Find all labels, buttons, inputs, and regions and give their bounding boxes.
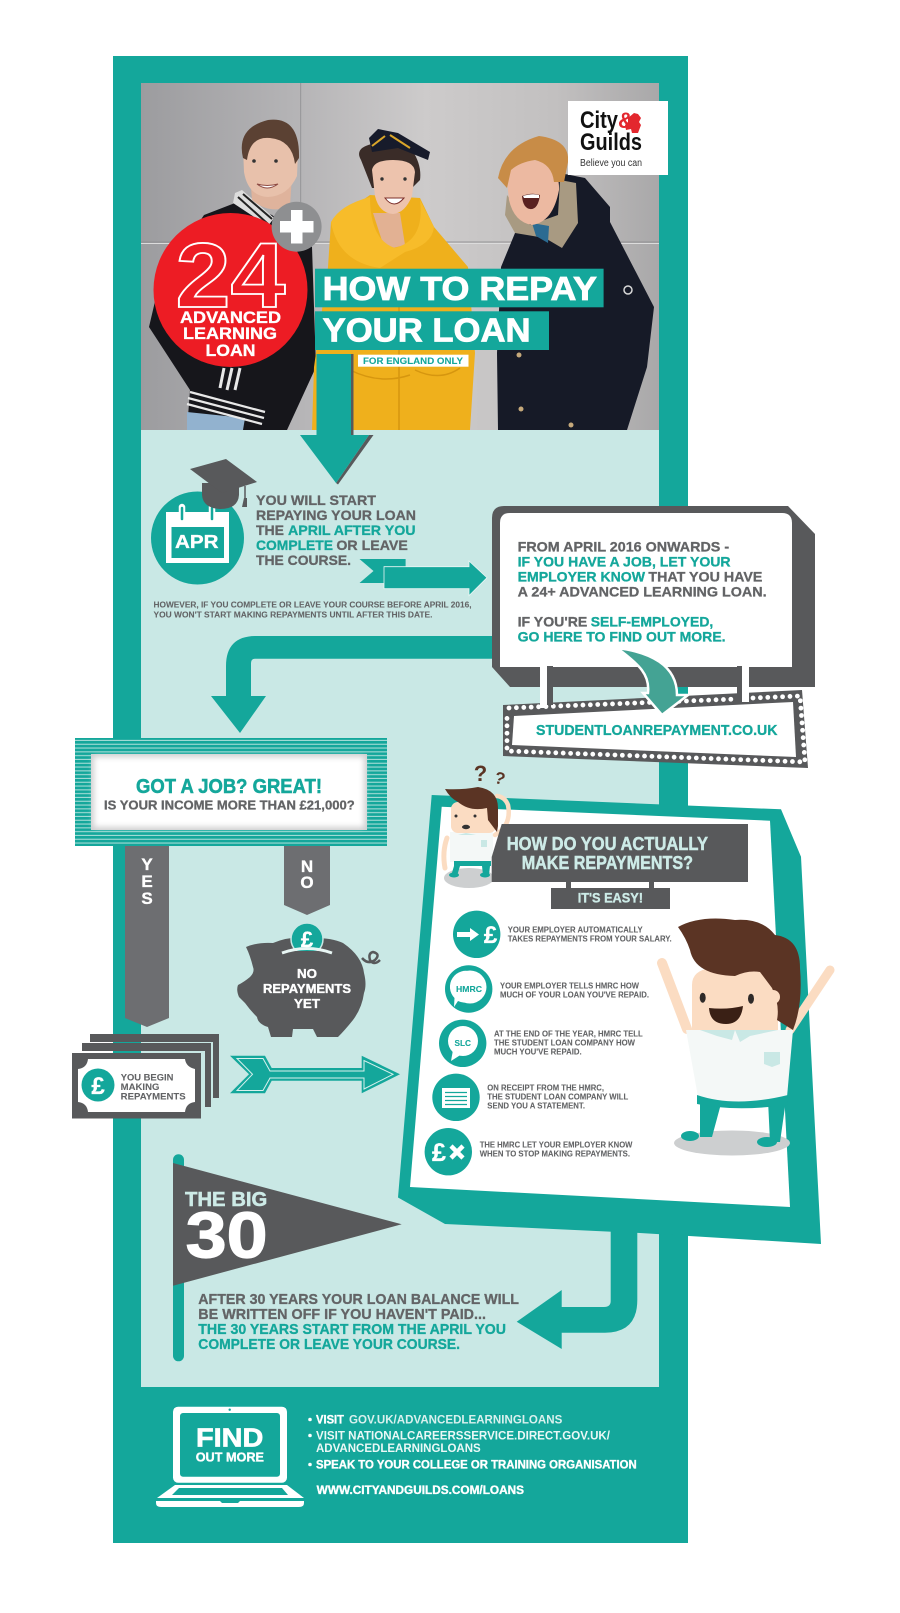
ribbon: yes [125,846,169,1027]
flag: the big 30 [173,1154,402,1361]
title: YOUR LOAN [323,312,531,349]
outer teal frame [113,56,688,1543]
arrow: ribbon arrow to billboard [360,559,487,596]
step 2: employer tells HMRC [445,965,649,1013]
step 1: employer takes repayments: YOUR EMPLOYER AUTOMATICALLY [508,925,643,935]
text: you will start repaying: THE [256,522,284,538]
list: find out more links: VISIT [316,1414,344,1426]
character: confused man [444,761,509,888]
list: find out more links: GOV.UK/ADVANCEDLEARNINGLOANS [349,1414,563,1426]
step 2: employer tells HMRC: MUCH OF YOUR LOAN YOU'VE REPAID. [500,989,649,999]
icon: banknotes you begin making repayments: YOU BEGIN [121,1073,174,1084]
panel: got a job question [75,738,387,846]
logo: City and Guilds: City [580,107,619,134]
text: you will start repaying: THE COURSE. [256,552,351,568]
text: you will start repaying: YOU WILL START [256,492,376,508]
text: note on April 2016: YOU WON'T START MAKING REPAYMENTS UNTIL AFTER THIS DATE. [154,609,432,619]
logo: City and Guilds: Guilds [580,129,642,156]
icon: calendar with graduation cap: APR [175,532,218,552]
text: you will start repaying: OR LEAVE [336,537,408,553]
light panel background [141,430,659,1387]
badge: 24+ advanced learning loan: LEARNING [183,324,277,343]
heading: how do you actually make repayments [492,824,748,909]
character: confused man: ? [492,768,507,789]
panel: header photo [141,83,659,430]
text: you will start repaying: COMPLETE [256,537,333,553]
list: find out more links: ADVANCEDLEARNINGLOANS [316,1443,481,1455]
list: find out more links [308,1414,637,1497]
step 1: employer takes repayments: £ [484,922,498,949]
ribbon: yes: Y [141,855,153,874]
ribbon: yes: E [141,872,153,891]
panel: billboard employer note: GO HERE TO FIND OUT MORE. [518,629,726,645]
title [315,269,604,350]
photo: man on right [497,136,654,430]
icon: piggy bank: YET [294,997,320,1011]
step 3: HMRC tells student loan company: MUCH YOU'VE REPAID. [494,1047,582,1057]
label: for England only: FOR ENGLAND ONLY [363,356,464,367]
step 4: statement: ON RECEIPT FROM THE HMRC, [487,1083,604,1093]
icon: laptop find out more [156,1407,304,1507]
text: after 30 years: AFTER 30 YEARS YOUR LOAN BALANCE WILL [198,1292,519,1308]
badge: 24+ advanced learning loan: ADVANCED [180,308,281,327]
step 5: stop repayments: £ [432,1139,446,1167]
text: after 30 years: BE WRITTEN OFF IF YOU HAVEN'T PAID... [198,1307,486,1323]
photo: woman in yellow coat [312,129,475,430]
panel: got a job question: GOT A JOB? GREAT! [136,776,322,798]
panel: billboard employer note: A 24+ ADVANCED LEARNING LOAN. [518,584,767,600]
ribbon: no: N [301,857,313,876]
list: find out more links: WWW.CITYANDGUILDS.COM/LOANS [317,1485,524,1497]
panel: billboard employer note: THAT YOU HAVE [648,569,762,585]
icon: plus circle [272,202,322,252]
step 1: employer takes repayments: TAKES REPAYMENTS FROM YOUR SALARY. [508,934,672,944]
arrow: connector below panel [517,1230,637,1349]
logo: City and Guilds [568,101,668,175]
badge: 24+ advanced learning loan: 24 [176,225,286,327]
badge: 24+ advanced learning loan: LOAN [206,341,256,360]
arrow: down from title [300,354,374,484]
step 3: HMRC tells student loan company: THE STUDENT LOAN COMPANY HOW [494,1038,635,1048]
badge: 24+ advanced learning loan [154,202,322,367]
logo: City and Guilds: & [618,108,634,133]
panel: billboard employer note: EMPLOYER KNOW [518,569,646,585]
icon: piggy bank [237,923,380,1037]
step 4: statement: THE STUDENT LOAN COMPANY WILL [487,1092,628,1102]
text: you will start repaying: APRIL AFTER YOU [288,522,416,538]
step 3: HMRC tells student loan company: SLC [454,1038,471,1048]
icon: piggy bank: REPAYMENTS [263,982,351,996]
icon: laptop find out more: FIND [196,1423,263,1453]
icon: banknotes you begin making repayments [72,1034,219,1118]
ribbon: no [284,846,330,915]
panel: billboard employer note [492,506,815,708]
step 3: HMRC tells student loan company: AT THE END OF THE YEAR, HMRC TELL [494,1029,643,1039]
panel: website sign: STUDENTLOANREPAYMENT.CO.UK [536,723,778,739]
text: after 30 years: COMPLETE OR LEAVE YOUR COURSE. [198,1337,460,1353]
panel: billboard employer note: IF YOU'RE [518,614,587,630]
ribbon: no: O [300,873,314,892]
panel: got a job question: IS YOUR INCOME MORE THAN £21,000? [104,797,355,812]
heading: how do you actually make repayments: HOW DO YOU ACTUALLY [507,833,709,854]
panel: billboard employer note: IF YOU HAVE A JOB, LET YOUR [518,554,731,570]
icon: banknotes you begin making repayments: £ [91,1073,105,1100]
panel: billboard employer note: SELF-EMPLOYED, [591,614,713,630]
text: after 30 years: THE 30 YEARS START FROM THE APRIL YOU [198,1322,506,1338]
list: find out more links: VISIT NATIONALCAREERSSERVICE.DIRECT.GOV.UK/ [316,1430,611,1442]
flag: the big 30: THE BIG [185,1189,267,1211]
panel: website sign [503,690,808,768]
panel: how do you make repayments [398,761,830,1244]
step 2: employer tells HMRC: HMRC [456,984,482,994]
heading: how do you actually make repayments: IT'S EASY! [578,890,643,906]
icon: calendar with graduation cap [151,459,257,584]
ribbon: yes: S [141,889,153,908]
step 2: employer tells HMRC: YOUR EMPLOYER TELLS HMRC HOW [500,980,639,990]
arrow: curved arrow to website [617,648,688,715]
step 4: statement: SEND YOU A STATEMENT. [487,1101,585,1111]
list: find out more links: SPEAK TO YOUR COLLEGE OR TRAINING ORGANISATION [316,1459,637,1471]
arrow: chevron to repayments panel [230,1056,400,1093]
icon: pound coin: £ [301,927,314,952]
title: HOW TO REPAY [323,270,597,307]
arrow: connector to job box [211,636,500,733]
step 5: stop repayments [425,1128,632,1175]
text: after 30 years [198,1292,519,1353]
step 4: statement [432,1074,628,1121]
icon: banknotes you begin making repayments: MAKING [121,1082,159,1093]
icon: pound coin [291,923,323,955]
step 5: stop repayments: THE HMRC LET YOUR EMPLOYER KNOW [480,1139,632,1149]
character: happy man [662,919,830,1156]
text: note on April 2016: HOWEVER, IF YOU COMPLETE OR LEAVE YOUR COURSE BEFORE APRIL 2016, [154,600,472,610]
logo: City and Guilds: Believe you can [580,158,642,169]
character: confused man: ? [474,761,487,786]
step 5: stop repayments: WHEN TO STOP MAKING REPAYMENTS. [480,1148,630,1158]
icon: banknotes you begin making repayments: REPAYMENTS [121,1091,186,1102]
step 3: HMRC tells student loan company [439,1020,643,1067]
step 1: employer takes repayments [453,911,672,958]
flag: the big 30: 30 [186,1198,268,1271]
text: you will start repaying: REPAYING YOUR LOAN [256,507,416,523]
text: you will start repaying [256,492,416,568]
panel: billboard employer note: FROM APRIL 2016 ONWARDS - [518,539,729,555]
icon: piggy bank: NO [297,967,317,981]
icon: laptop find out more: OUT MORE [196,1449,264,1464]
text: note on April 2016 [154,600,472,619]
heading: how do you actually make repayments: MAKE REPAYMENTS? [522,852,693,873]
photo: man on left [149,120,316,430]
